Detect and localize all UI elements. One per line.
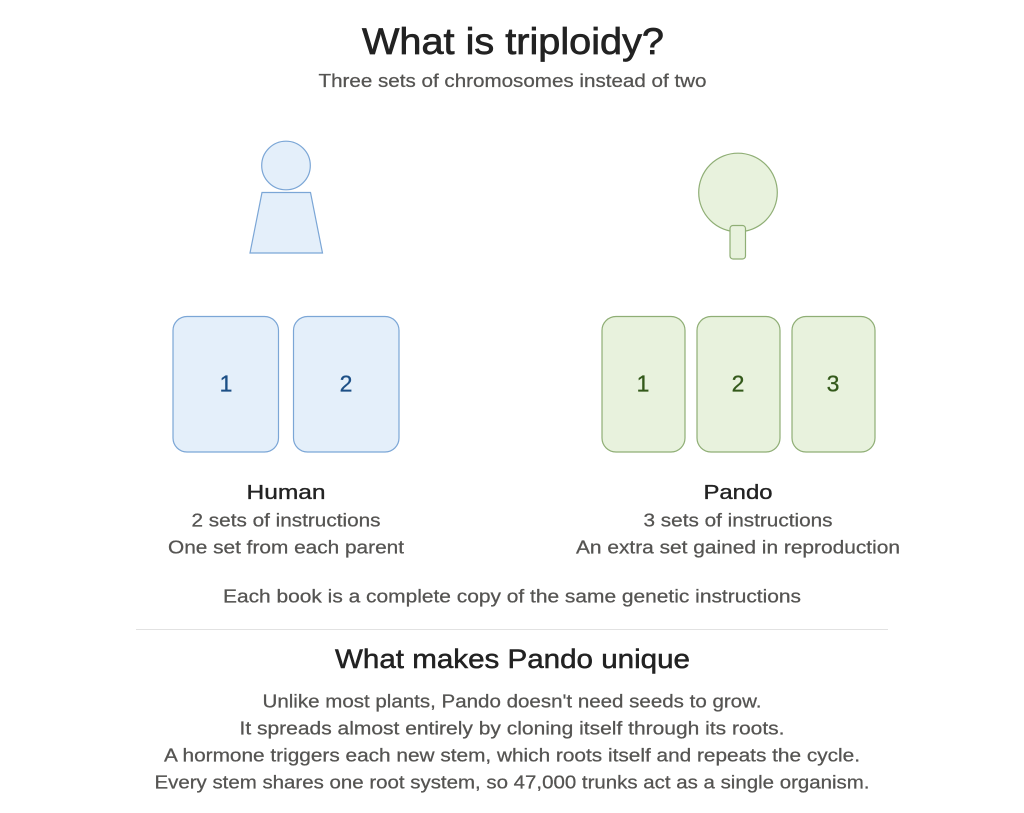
pando book 3 <box>792 316 875 452</box>
pando book 1: 1 <box>637 370 649 396</box>
book note: Each book is a complete copy of the same genetic instructions <box>223 586 801 606</box>
explanation text: A hormone triggers each new stem, which roots itself and repeats the cycle. <box>164 746 860 766</box>
human label: Human <box>246 482 326 504</box>
pando description: 3 sets of instructions <box>644 510 832 530</box>
pando description: An extra set gained in reproduction <box>576 538 900 558</box>
pando book 3: 3 <box>827 370 839 396</box>
section heading: What makes Pando unique <box>335 644 690 674</box>
human description <box>168 510 404 558</box>
human description: One set from each parent <box>168 538 404 558</box>
panel: human <box>168 141 404 557</box>
subtitle: Three sets of chromosomes instead of two <box>318 71 706 91</box>
human book 2 <box>294 316 399 452</box>
title: What is triploidy? <box>362 21 664 62</box>
pando label: Pando <box>704 482 772 504</box>
explanation text: It spreads almost entirely by cloning itself through its roots. <box>240 718 784 738</box>
icon: tree <box>699 153 777 259</box>
pando book 2 <box>697 316 780 452</box>
icon: person <box>250 141 322 253</box>
explanation text: Every stem shares one root system, so 47,000 trunks act as a single organism. <box>154 772 870 792</box>
panel: pando <box>576 153 900 557</box>
explanation text: Unlike most plants, Pando doesn't need seeds to grow. <box>262 692 762 712</box>
human book 1: 1 <box>220 370 232 396</box>
human book 2: 2 <box>340 370 352 396</box>
pando book 1 <box>602 316 685 452</box>
pando book 2: 2 <box>732 370 744 396</box>
pando description <box>576 510 900 558</box>
explanation text <box>154 692 870 792</box>
human book 1 <box>173 316 278 452</box>
human description: 2 sets of instructions <box>192 510 380 530</box>
